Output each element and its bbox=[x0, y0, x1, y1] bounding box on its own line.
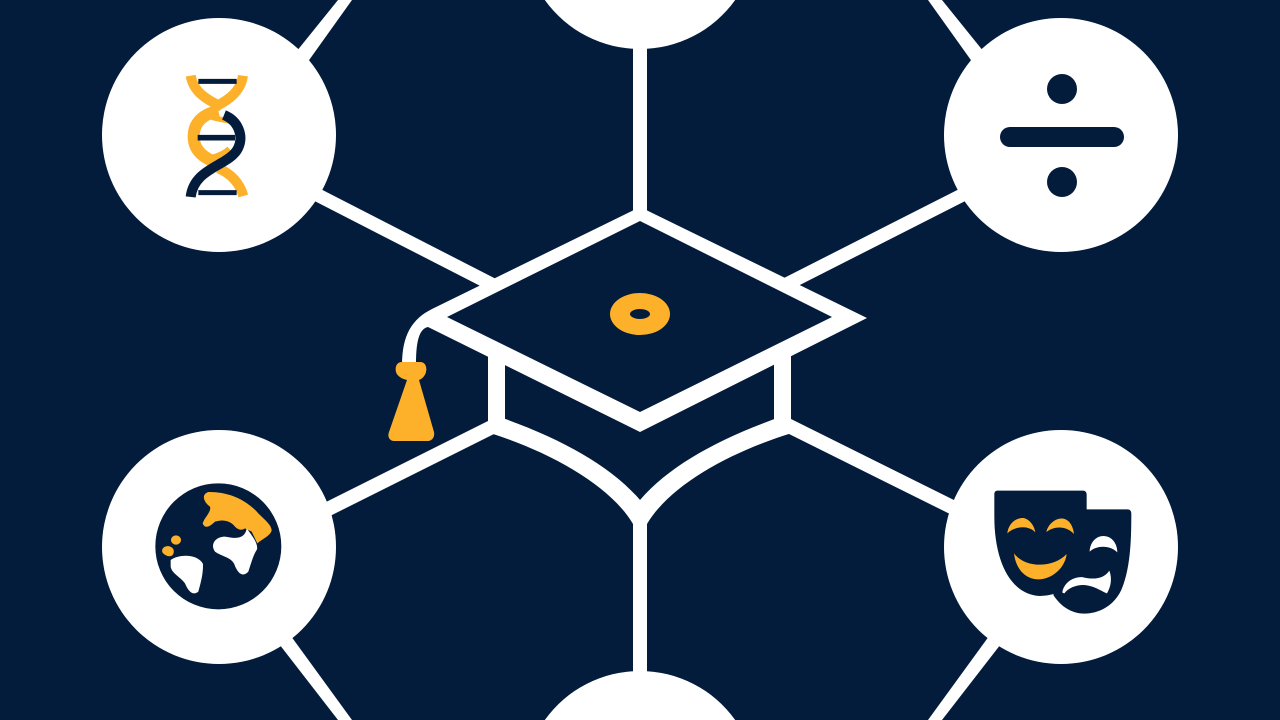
icon: division sign bbox=[1000, 74, 1124, 197]
icon: globe bbox=[155, 483, 281, 609]
connector lines bbox=[276, 0, 1004, 720]
tassel bbox=[388, 362, 434, 441]
graduation cap bbox=[388, 207, 867, 524]
top center node bbox=[545, 0, 735, 49]
cap base curve bbox=[490, 416, 792, 524]
button bbox=[610, 293, 670, 335]
mortarboard with tassel cord bbox=[402, 207, 867, 432]
cap skirt bbox=[488, 352, 791, 425]
bottom center node bbox=[545, 671, 735, 720]
node: biology bbox=[102, 18, 336, 252]
node: mathematics bbox=[944, 18, 1178, 252]
node: geography bbox=[102, 430, 336, 664]
node: arts bbox=[944, 430, 1178, 664]
icon: DNA helix bbox=[191, 76, 243, 197]
icon: theatre masks bbox=[994, 491, 1131, 614]
